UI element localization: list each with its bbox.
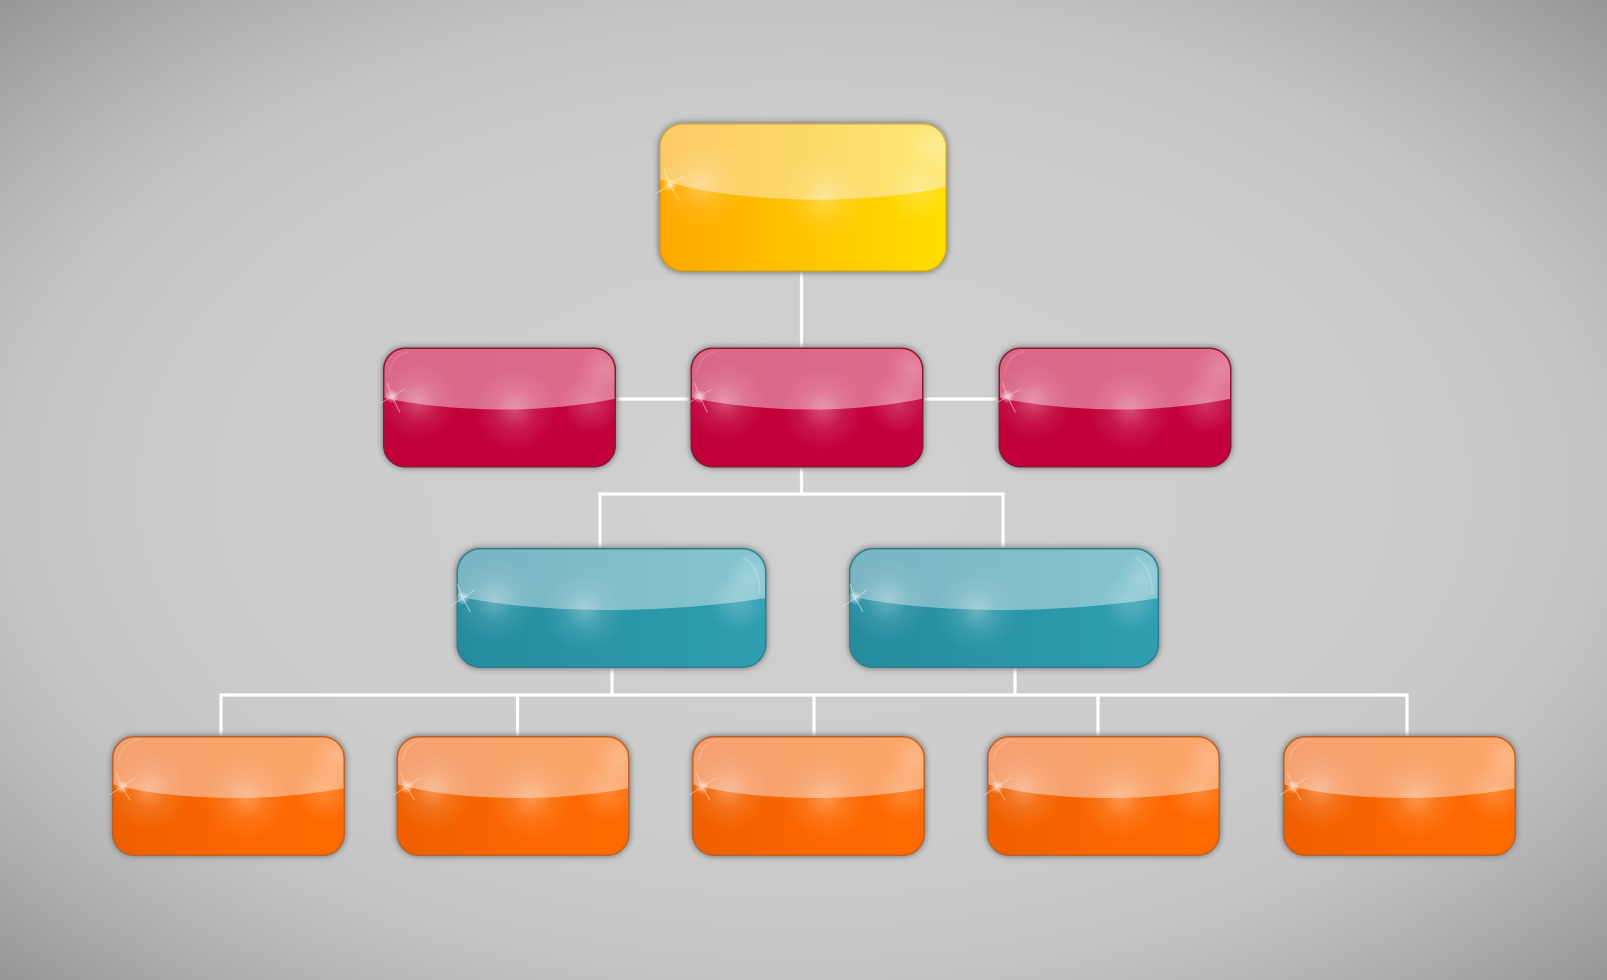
second level box: red centre — [686, 344, 938, 468]
third level box: teal left — [450, 548, 774, 668]
top box: yellow — [655, 119, 963, 272]
second level box: red left — [378, 344, 631, 468]
connector lines — [221, 272, 1407, 736]
fourth level box: orange 4 — [983, 732, 1237, 856]
third level box: teal right — [842, 548, 1167, 668]
fourth level box: orange 2 — [392, 732, 646, 856]
fourth level box: orange 5 — [1279, 732, 1533, 856]
fourth level box: orange 3 — [688, 732, 942, 856]
fourth level box: orange 1 — [108, 732, 362, 856]
second level box: red right — [994, 344, 1246, 468]
